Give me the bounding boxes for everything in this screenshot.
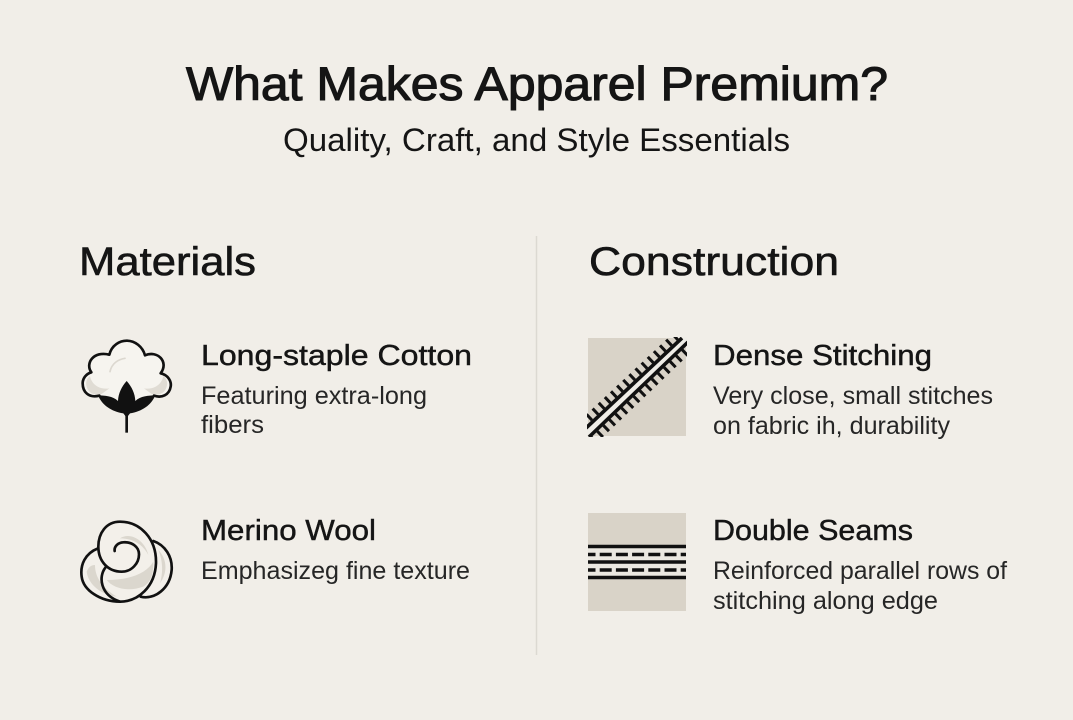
- heading: long-staple cotton: Long-staple Cotton: [201, 340, 472, 372]
- heading: double seams: Double Seams: [713, 515, 913, 547]
- description: dense stitching: [713, 382, 993, 440]
- icon: cotton boll: [83, 341, 171, 433]
- description: cotton: [201, 382, 427, 439]
- description: dense stitching: Very close, small stitches: [713, 382, 993, 410]
- heading: materials: Materials: [79, 240, 256, 284]
- description: dense stitching: on fabric ih, durability: [713, 412, 950, 440]
- description: wool: Emphasizeg fine texture: [201, 557, 470, 585]
- heading: dense stitching: Dense Stitching: [713, 340, 932, 372]
- item: double seams: [588, 513, 1007, 615]
- item: merino wool: [81, 515, 470, 602]
- subtitle: Quality, Craft, and Style Essentials: [283, 122, 790, 158]
- heading: construction: Construction: [589, 240, 839, 284]
- panel: construction: [582, 240, 1007, 615]
- description: double seams: Reinforced parallel rows of: [713, 557, 1007, 585]
- panel: materials: [79, 240, 472, 602]
- icon: dense stitching swatch: [587, 337, 687, 437]
- icon: wool swirl: [81, 522, 172, 602]
- heading: merino wool: Merino Wool: [201, 515, 376, 547]
- description: double seams: [713, 557, 1007, 615]
- description: cotton: Featuring extra-long: [201, 382, 427, 410]
- description: cotton: fibers: [201, 411, 264, 439]
- item: long-staple cotton: [83, 340, 472, 439]
- item: dense stitching: [582, 334, 993, 441]
- icon: double seams swatch: [588, 513, 686, 611]
- description: double seams: stitching along edge: [713, 587, 938, 615]
- title: What Makes Apparel Premium?: [186, 57, 888, 110]
